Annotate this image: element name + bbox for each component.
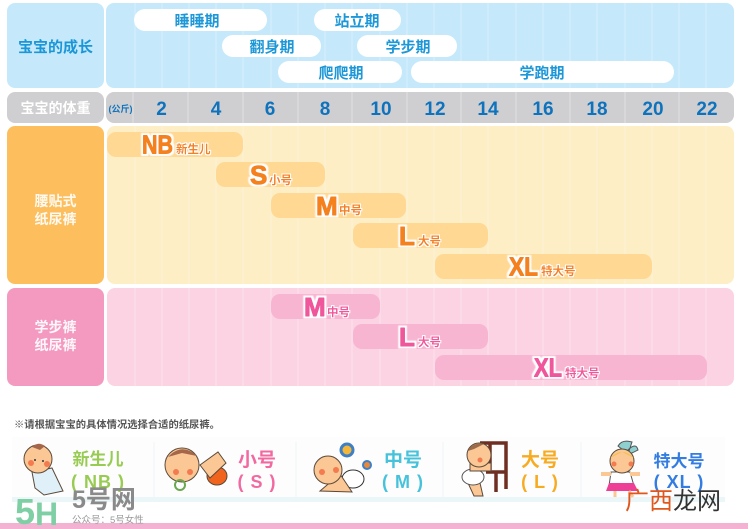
- bar: NB: 新生儿: [176, 142, 211, 156]
- icon: small baby: [165, 448, 227, 490]
- label: medium: 中号: [384, 449, 422, 471]
- bar: XL: [435, 252, 652, 282]
- bar: M: [271, 191, 406, 221]
- label: small: [238, 449, 276, 492]
- bar: XL: 特大号: [541, 264, 576, 278]
- panel: growth stages: 翻身期: [249, 38, 295, 56]
- panel: growth label: 宝宝的成长: [18, 38, 93, 56]
- panel: weight scale: 16: [532, 99, 554, 120]
- panel: weight scale: 2: [156, 99, 167, 120]
- bar: L: L: [399, 322, 415, 352]
- bar: M: 中号: [339, 203, 362, 217]
- panel: weight scale: 20: [642, 99, 664, 120]
- bar: M: M: [316, 191, 338, 221]
- bar: XL: [435, 352, 707, 382]
- panel: growth stages: 学跑期: [519, 64, 565, 82]
- label: large: ( L ): [521, 472, 559, 492]
- bar: XL: XL: [509, 252, 538, 282]
- panel: growth stages: 学步期: [385, 38, 431, 56]
- bar: M: M: [304, 292, 326, 322]
- label: large: 大号: [521, 449, 559, 471]
- bar: NB: NB: [142, 130, 173, 160]
- bar: L: [353, 221, 488, 251]
- panel: weight label: [7, 92, 104, 123]
- label: newborn: ( NB ): [71, 472, 125, 492]
- icon: large baby with chair: [462, 443, 506, 496]
- watermark: 5号网 logo: 5号网: [72, 486, 136, 514]
- panel: tape diapers label: [7, 126, 104, 284]
- bar: XL: 特大号: [565, 366, 600, 380]
- note text: ※请根据宝宝的具体情况选择合适的纸尿裤。: [14, 418, 220, 431]
- bar: L: L: [399, 221, 415, 251]
- panel: growth stages: [106, 3, 734, 88]
- label: large: [521, 449, 559, 492]
- panel: pull-up diapers chart: [107, 288, 734, 386]
- bar: L: 大号: [418, 234, 441, 248]
- label: medium: [382, 449, 424, 492]
- panel: growth stages: 睡睡期: [174, 13, 220, 30]
- bar: S: S: [250, 160, 267, 190]
- panel: pull-up diapers label: [7, 288, 104, 386]
- watermark: 广西龙网: 广西龙网: [625, 488, 721, 515]
- panel: weight scale: [106, 92, 734, 123]
- label: small: ( S ): [238, 472, 276, 492]
- panel: pull-up diapers label: 纸尿裤: [34, 337, 76, 353]
- panel: weight scale: 12: [424, 99, 446, 120]
- watermark: 5号网 logo: [15, 486, 144, 529]
- icon: medium baby: [314, 444, 371, 492]
- label: newborn: [71, 449, 125, 492]
- panel: weight scale: 10: [370, 99, 392, 120]
- icon: extra large toddler: [601, 441, 640, 497]
- panel: weight scale: (公斤): [108, 103, 132, 114]
- bar: L: [353, 322, 488, 352]
- bar: L: 大号: [418, 335, 441, 349]
- bar: S: 小号: [269, 174, 292, 187]
- label: newborn: 新生儿: [72, 449, 124, 469]
- bar: S: [216, 160, 325, 190]
- panel: weight scale: 4: [211, 99, 222, 120]
- bottom pink strip: [0, 523, 748, 529]
- panel: growth label: [7, 3, 104, 88]
- bar: XL: XL: [534, 352, 562, 382]
- panel: tape diapers label: 纸尿裤: [34, 211, 76, 227]
- label: medium: ( M ): [382, 472, 424, 492]
- panel: pull-up diapers label: 学步裤: [34, 319, 76, 335]
- icon: newborn baby: [24, 444, 63, 495]
- label: extra large: ( XL ): [654, 472, 704, 492]
- panel: weight scale: 14: [477, 99, 499, 120]
- panel: growth stages: 爬爬期: [318, 65, 364, 82]
- panel: growth stages: 站立期: [334, 12, 380, 30]
- bar: M: [271, 292, 380, 322]
- panel: weight scale: 8: [320, 99, 330, 120]
- panel: weight label: 宝宝的体重: [20, 100, 90, 116]
- bar: NB: [107, 130, 243, 160]
- label: extra large: 特大号: [654, 452, 704, 471]
- panel: size legend: [12, 437, 725, 502]
- panel: weight scale: 6: [265, 99, 275, 120]
- watermark: 5号网 logo: 公众号：5号女性: [72, 514, 144, 526]
- panel: weight scale: 22: [696, 99, 718, 120]
- bar: M: 中号: [327, 305, 350, 319]
- panel: tape diapers label: 腰贴式: [34, 193, 76, 209]
- panel: tape diapers chart: [107, 126, 734, 284]
- panel: weight scale: 18: [586, 99, 608, 120]
- label: extra large: [654, 452, 704, 492]
- label: small: 小号: [238, 449, 276, 471]
